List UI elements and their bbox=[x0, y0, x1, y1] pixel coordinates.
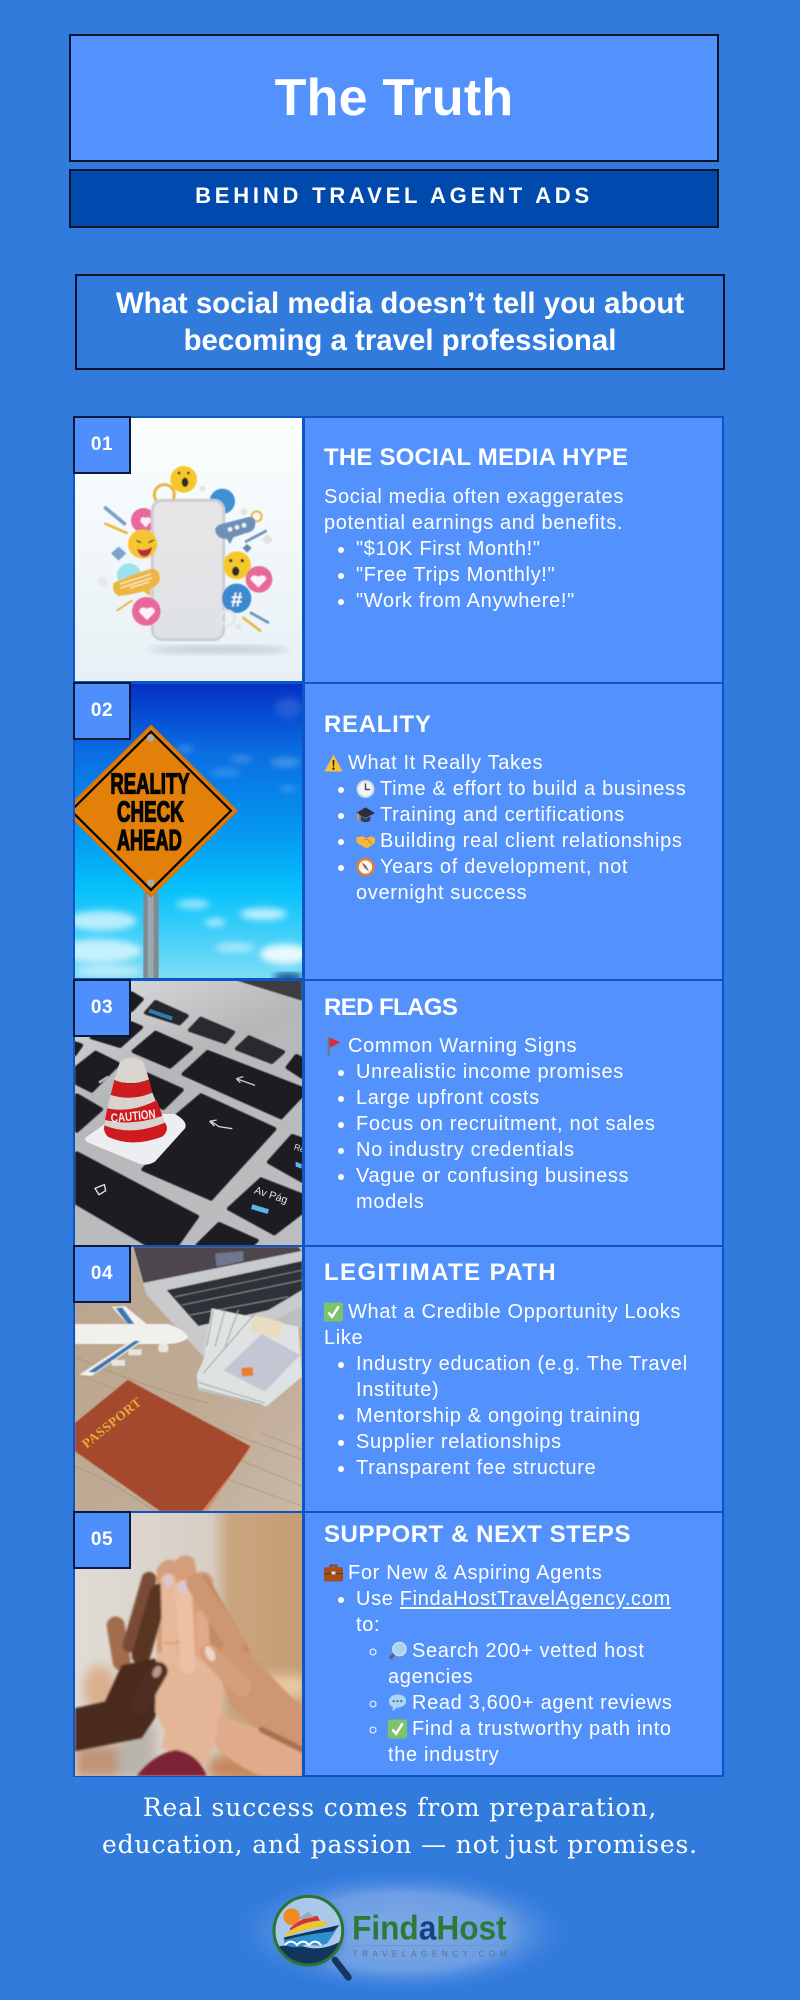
closing statement: education, and passion — not just promises. bbox=[102, 1830, 698, 1858]
number badge 01: 01 bbox=[91, 434, 113, 455]
body text and bullets: What It Really Takes bbox=[348, 752, 543, 774]
body text and bullets: "Free Trips Monthly!" bbox=[356, 564, 555, 586]
intro statement box: becoming a travel professional bbox=[184, 324, 616, 357]
title box: The Truth bbox=[275, 69, 513, 127]
subtitle band: BEHIND TRAVEL AGENT ADS bbox=[195, 183, 593, 208]
image: caution cone on keyboard: Av Pág bbox=[253, 1184, 289, 1206]
panel: 01 the social media hype bbox=[73, 416, 724, 684]
heading: legitimate path: LEGITIMATE PATH bbox=[324, 1258, 557, 1286]
image: passport, toy plane, laptop and cash bbox=[75, 1247, 302, 1511]
intro statement box: What social media doesn’t tell you about bbox=[116, 287, 684, 320]
text panel background bbox=[305, 1513, 722, 1775]
title box bbox=[69, 34, 719, 162]
number badge 04: 04 bbox=[91, 1263, 113, 1284]
body text and bullets bbox=[324, 752, 686, 904]
body text and bullets: Common Warning Signs bbox=[348, 1035, 577, 1057]
body text and bullets: Industry education (e.g. The Travel bbox=[356, 1353, 688, 1375]
body text and bullets: Supplier relationships bbox=[356, 1431, 562, 1453]
number badge 05 bbox=[73, 1511, 131, 1569]
body text and bullets bbox=[324, 486, 624, 612]
body text and bullets: overnight success bbox=[356, 882, 527, 904]
panel: 04 legitimate path bbox=[73, 1245, 724, 1513]
body text and bullets: Time & effort to build a business bbox=[380, 778, 686, 800]
panel: 03 red flags bbox=[73, 979, 724, 1247]
body text and bullets: models bbox=[356, 1191, 424, 1213]
body text and bullets: Find a trustworthy path into bbox=[412, 1718, 672, 1740]
body text and bullets: Social media often exaggerates bbox=[324, 486, 624, 508]
text panel background bbox=[305, 981, 722, 1245]
heading: reality: REALITY bbox=[324, 710, 432, 738]
body text and bullets: "Work from Anywhere!" bbox=[356, 590, 575, 612]
subtitle band bbox=[69, 169, 719, 228]
body text and bullets: potential earnings and benefits. bbox=[324, 512, 623, 534]
body text and bullets: Read 3,600+ agent reviews bbox=[412, 1692, 673, 1714]
panel: 02 reality bbox=[73, 682, 724, 981]
number badge 05: 05 bbox=[91, 1529, 113, 1550]
number badge 02: 02 bbox=[91, 700, 113, 721]
image: phone with social media emoji: # bbox=[231, 589, 243, 612]
text panel background bbox=[305, 684, 722, 979]
text panel background bbox=[305, 418, 722, 682]
body text and bullets: agencies bbox=[388, 1666, 473, 1688]
image: stacked hands high five bbox=[75, 1513, 302, 1776]
image: passport, toy plane, laptop and cash: PASSPORT bbox=[79, 1394, 144, 1451]
body text and bullets: Vague or confusing business bbox=[356, 1165, 629, 1187]
body text and bullets: Years of development, not bbox=[380, 856, 628, 878]
image: caution cone on keyboard bbox=[75, 981, 302, 1245]
image: reality check ahead road sign bbox=[75, 684, 406, 1966]
intro statement box bbox=[75, 274, 725, 370]
image: caution cone on keyboard: CAUTION bbox=[110, 1107, 156, 1126]
body text and bullets bbox=[324, 1562, 673, 1766]
number badge 03: 03 bbox=[91, 997, 113, 1018]
body text and bullets: Search 200+ vetted host bbox=[412, 1640, 645, 1662]
body text and bullets: Like bbox=[324, 1327, 363, 1349]
heading: the social media hype: THE SOCIAL MEDIA HYPE bbox=[324, 444, 628, 471]
body text and bullets: to: bbox=[356, 1614, 380, 1636]
body text and bullets bbox=[324, 1301, 688, 1479]
body text and bullets: Unrealistic income promises bbox=[356, 1061, 624, 1083]
logo: FindaHost Travel Agency: TRAVELAGENCY.COM bbox=[353, 1950, 507, 1959]
heading: support and next steps: SUPPORT & NEXT STEPS bbox=[324, 1521, 631, 1548]
image: reality check ahead road sign: AHEAD bbox=[117, 825, 182, 857]
body text and bullets: Building real client relationships bbox=[380, 830, 683, 852]
image: reality check ahead road sign: REALITY bbox=[110, 768, 190, 800]
number badge 01 bbox=[73, 416, 131, 474]
image: reality check ahead road sign: CHECK bbox=[117, 797, 184, 829]
body text and bullets: Large upfront costs bbox=[356, 1087, 540, 1109]
body text and bullets bbox=[328, 1035, 655, 1213]
body text and bullets: Transparent fee structure bbox=[356, 1457, 596, 1479]
logo: FindaHost Travel Agency bbox=[252, 1876, 552, 1986]
logo: FindaHost Travel Agency: FindaHost bbox=[352, 1909, 507, 1947]
body text and bullets: What a Credible Opportunity Looks bbox=[348, 1301, 681, 1323]
body text and bullets: "$10K First Month!" bbox=[356, 538, 541, 560]
number badge 04 bbox=[73, 1245, 131, 1303]
body text and bullets: Training and certifications bbox=[380, 804, 625, 826]
body text and bullets: For New & Aspiring Agents bbox=[348, 1562, 602, 1584]
body text and bullets: Mentorship & ongoing training bbox=[356, 1405, 641, 1427]
panel: 05 support and next steps bbox=[73, 1511, 724, 1777]
body text and bullets: the industry bbox=[388, 1744, 499, 1766]
image: phone with social media emoji bbox=[75, 418, 302, 681]
body text and bullets: Institute) bbox=[356, 1379, 439, 1401]
text panel background bbox=[305, 1247, 722, 1511]
body text and bullets: No industry credentials bbox=[356, 1139, 575, 1161]
body text and bullets: Use FindaHostTravelAgency.com bbox=[356, 1588, 671, 1610]
closing statement: Real success comes from preparation, bbox=[143, 1792, 657, 1822]
number badge 02 bbox=[73, 682, 131, 740]
heading: red flags: RED FLAGS bbox=[324, 994, 457, 1021]
closing statement bbox=[102, 1792, 698, 1859]
body text and bullets: Focus on recruitment, not sales bbox=[356, 1113, 655, 1135]
number badge 03 bbox=[73, 979, 131, 1037]
